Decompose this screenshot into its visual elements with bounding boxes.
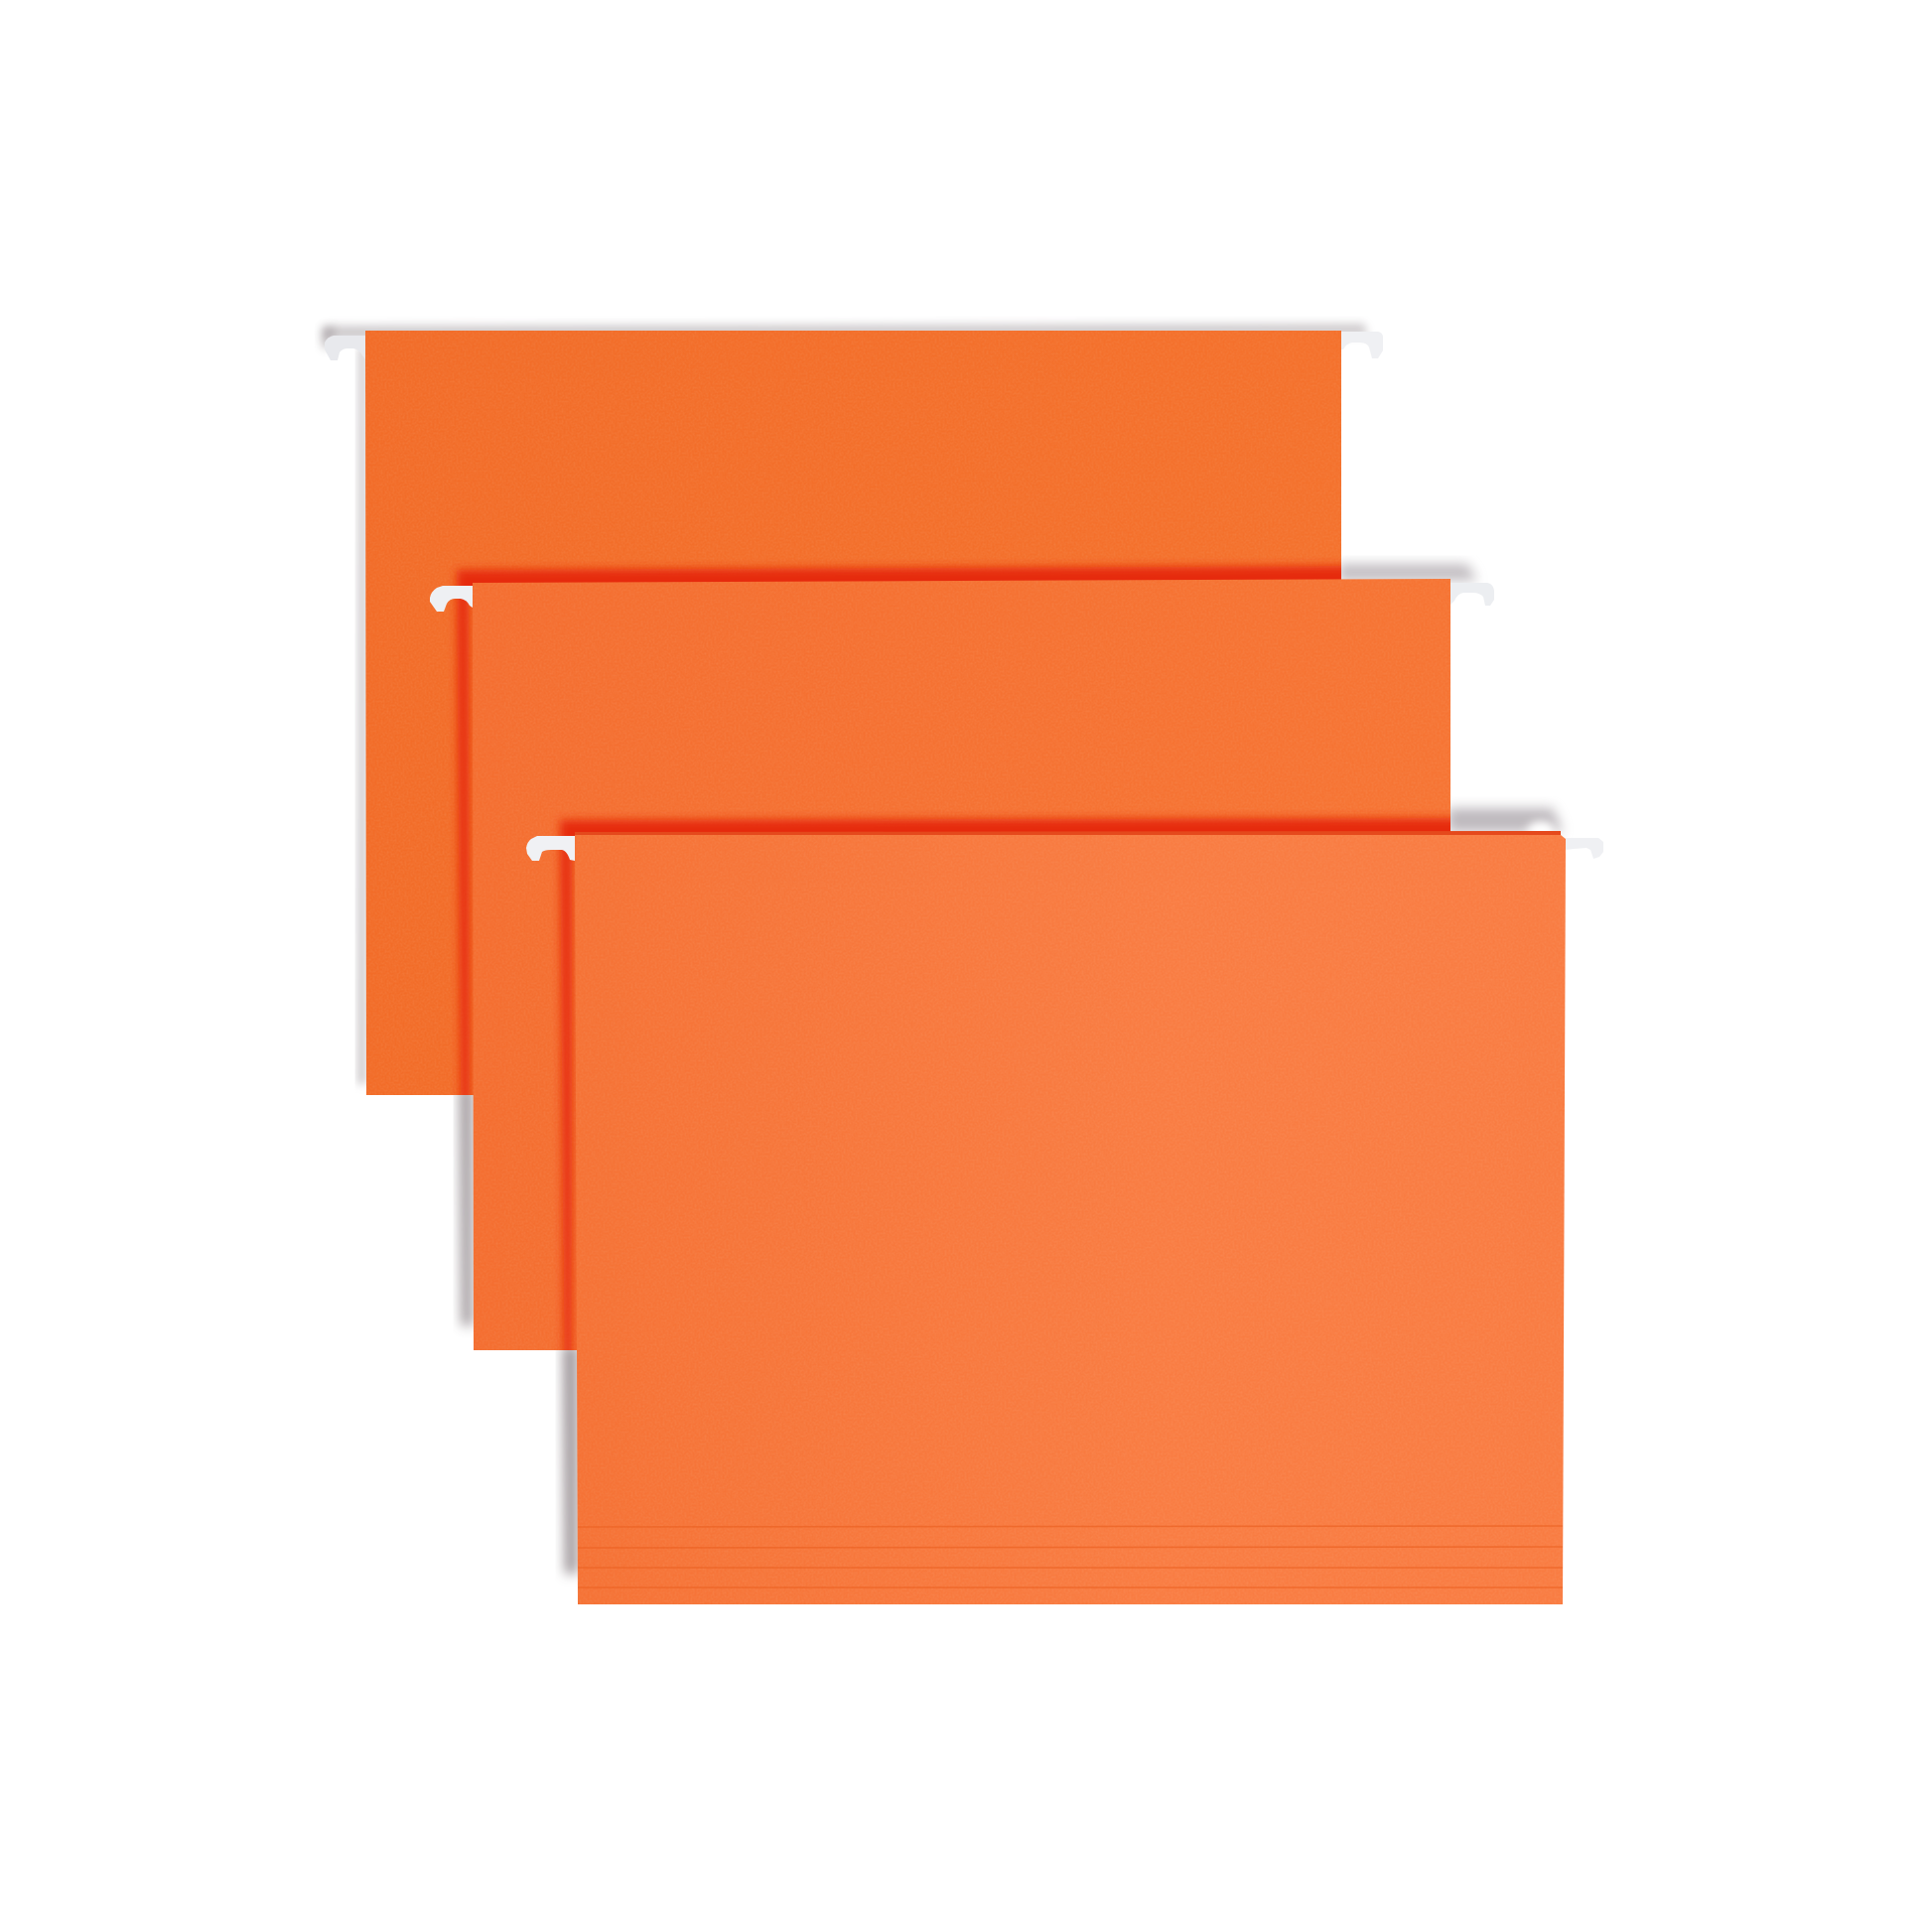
folder 2 (middle) [430,579,1494,1360]
panel: folder 1 body [365,331,1341,1095]
tab: folder 2 right hook [1450,583,1494,606]
folder 1 (back) [325,331,1383,1102]
grey cast shadows on white [322,324,1563,1574]
edge: folder 3 darker top strip [575,831,1561,836]
fold lines: folder 3 bottom score marks [578,1526,1563,1587]
panel: folder 2 body [473,579,1450,1350]
folder 3 (front) [526,831,1603,1604]
tab: folder 3 right hook [1566,838,1603,859]
tab: folder 2 left hook [430,586,473,612]
tab: folder 1 right hook [1341,332,1383,358]
illustration: three overlapping orange hanging folders [316,320,1603,1604]
tab: folder 1 left hook [325,336,365,360]
shadow: folder 3 on folder 2 [560,818,1459,1360]
panel: folder 3 body [575,835,1566,1604]
tab: folder 3 left hook [526,836,575,861]
shadow: folder 2 on folder 1 [457,566,1350,1102]
